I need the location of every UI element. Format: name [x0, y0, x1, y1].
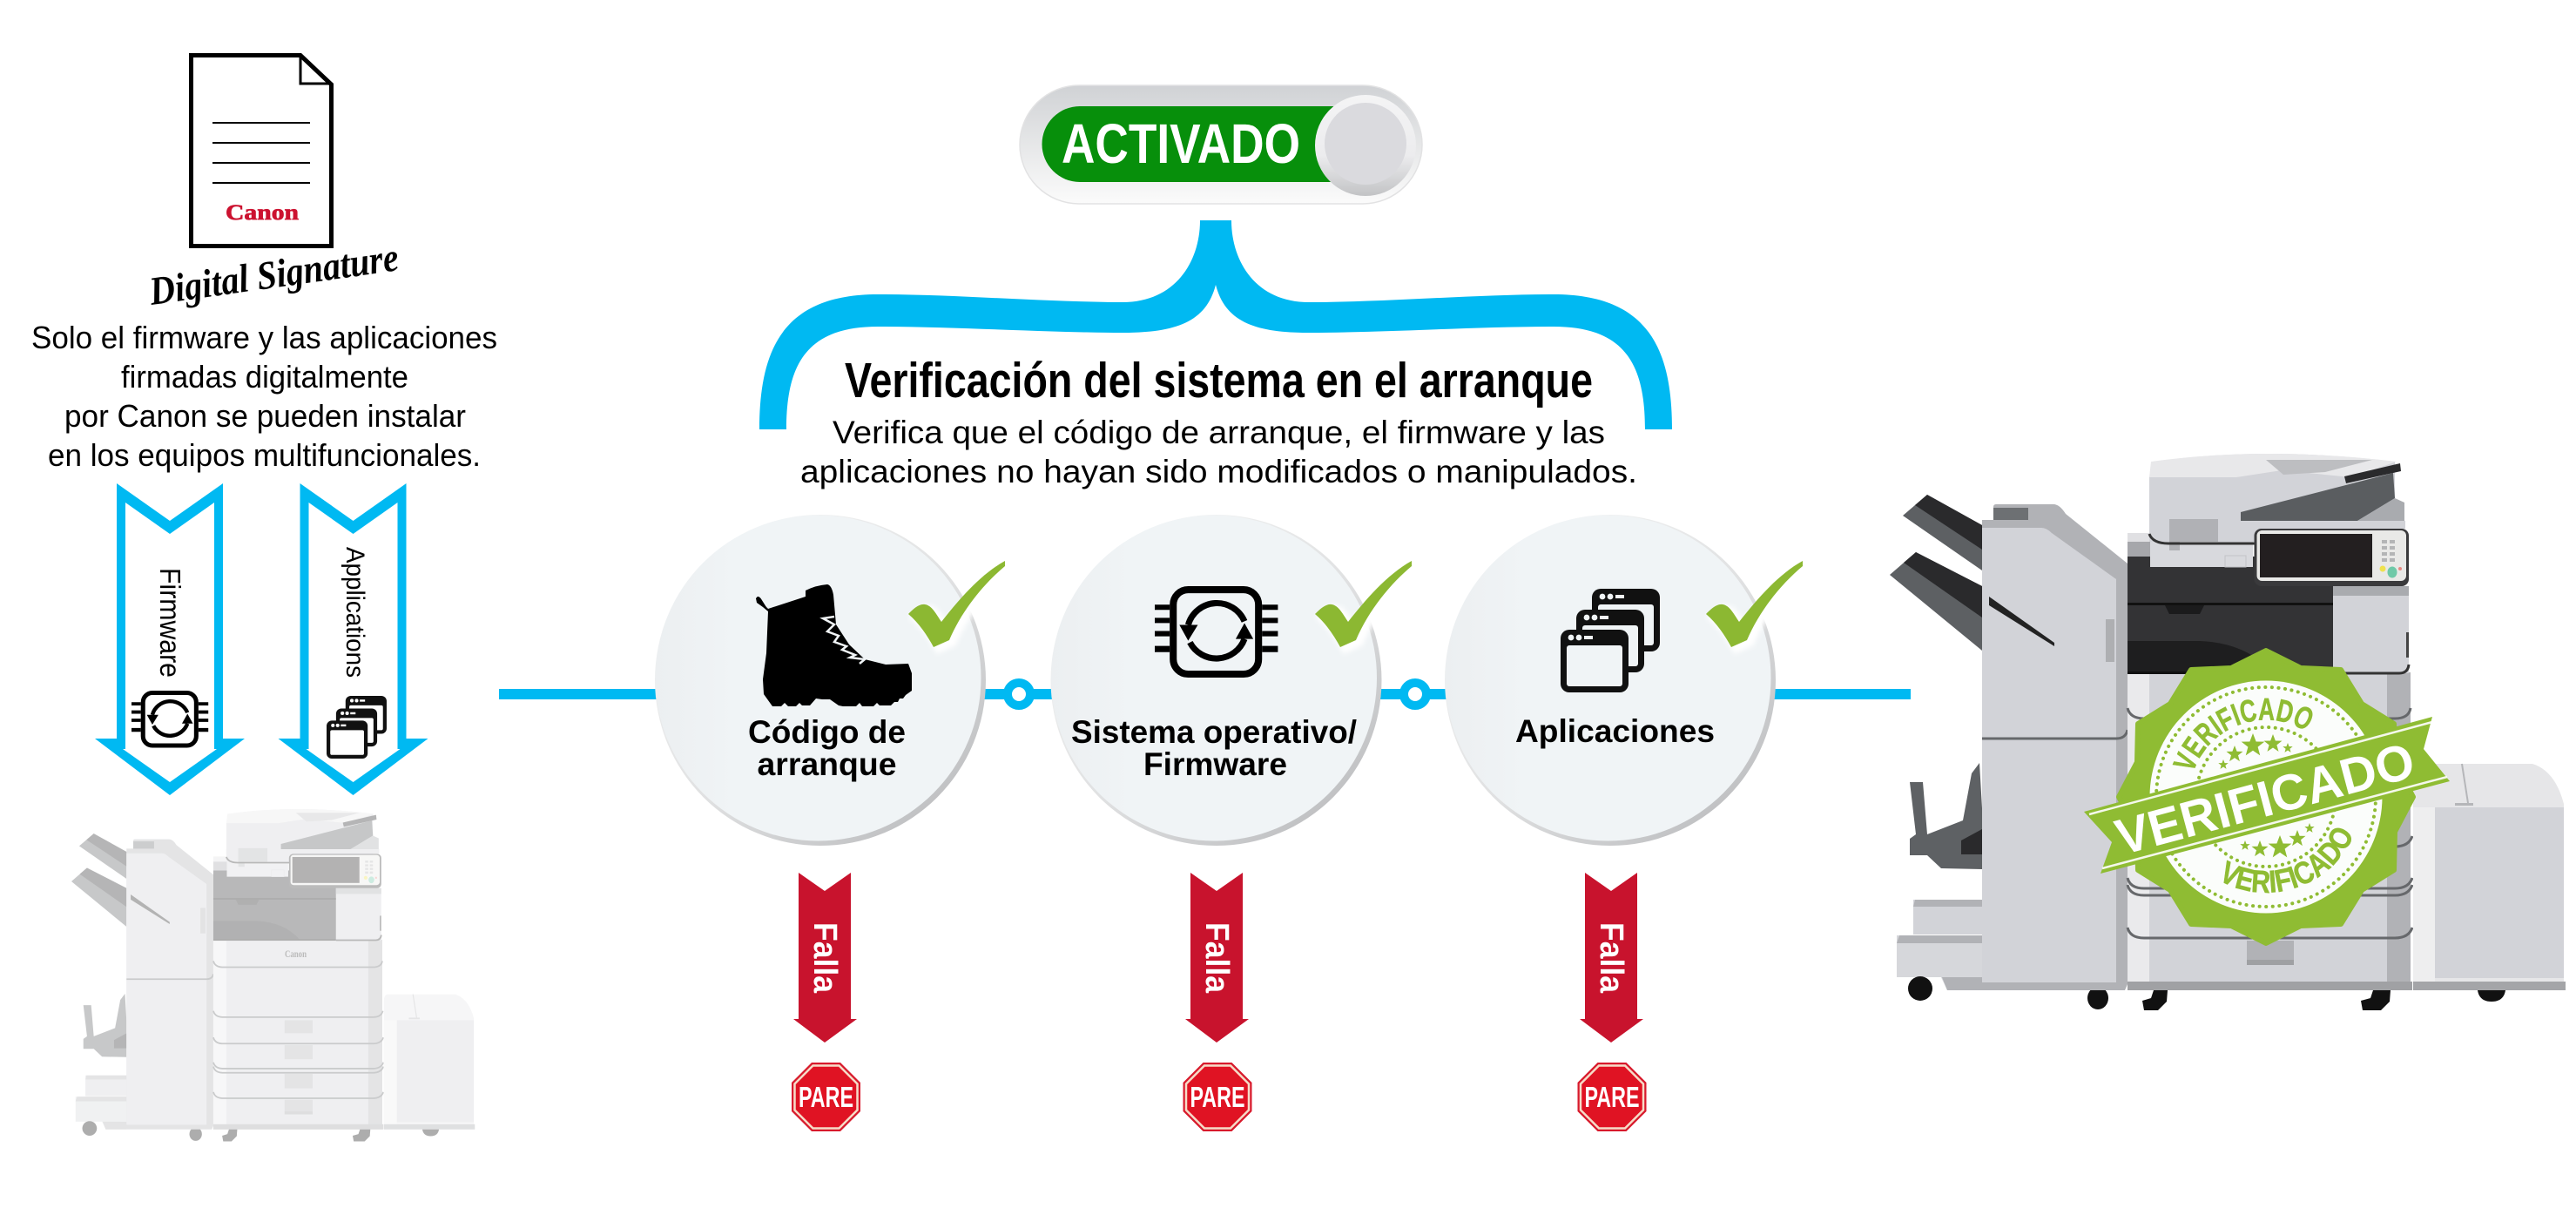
printer: faded installation target — [71, 809, 475, 1142]
stop sign 3 — [1578, 1063, 1646, 1131]
digital signature: Digital Signature — [145, 234, 401, 314]
stop sign 2: PARE — [1190, 1081, 1245, 1113]
label: Código de — [748, 714, 906, 750]
circle: applications — [1445, 515, 1776, 846]
verified badge — [2084, 648, 2450, 946]
description text: en los equipos multifuncionales. — [48, 437, 481, 473]
toggle switch — [1020, 85, 1422, 204]
fail arrow 3 — [1580, 873, 1643, 1043]
stop sign 1: PARE — [799, 1081, 853, 1113]
brace — [759, 220, 1672, 429]
fail arrow 1: Falla — [806, 922, 843, 994]
circle: operating system — [1050, 515, 1381, 846]
green checkmarks — [908, 561, 1807, 651]
firmware arrow: Firmware — [154, 568, 186, 678]
description text: firmadas digitalmente — [121, 359, 408, 395]
subheading — [800, 415, 1637, 489]
icon: chip — [1155, 590, 1278, 674]
description text: por Canon se pueden instalar — [64, 398, 466, 434]
heading: Verificación del sistema en el arranque — [845, 353, 1593, 408]
document icon: Canon — [226, 201, 299, 225]
label — [1071, 714, 1357, 782]
connector lines — [499, 683, 1911, 705]
printer: faded installation target: Canon — [285, 948, 307, 960]
label — [748, 714, 906, 782]
subheading: Verifica que el código de arranque, el firmware y las — [833, 415, 1605, 450]
toggle switch: ACTIVADO — [1062, 112, 1300, 175]
stop sign 3: PARE — [1585, 1081, 1639, 1113]
stop sign 2 — [1183, 1063, 1252, 1131]
icon: boot — [756, 584, 912, 706]
fail arrow 2 — [1185, 873, 1249, 1043]
label: arranque — [758, 746, 897, 782]
applications arrow: Applications — [341, 547, 369, 678]
firmware arrow — [95, 483, 245, 795]
description text: Solo el firmware y las aplicaciones — [31, 320, 497, 355]
ribbon: VERIFICADO — [2110, 732, 2420, 867]
label: Sistema operativo/ — [1071, 714, 1357, 750]
fail arrow 2: Falla — [1198, 922, 1235, 994]
icon: applications — [1561, 589, 1660, 692]
document icon — [192, 55, 332, 246]
subheading: aplicaciones no hayan sido modificados o manipulados. — [800, 454, 1637, 489]
circle: boot code — [655, 515, 986, 846]
fail arrow 1 — [793, 873, 857, 1043]
verified badge: VERIFICADO — [2224, 827, 2351, 894]
stop sign 1 — [792, 1063, 860, 1131]
label: Firmware — [1143, 746, 1287, 782]
printer: verified — [1890, 454, 2566, 1010]
fail arrow 3: Falla — [1593, 922, 1629, 994]
description text — [31, 320, 497, 473]
verified badge: VERIFICADO — [2172, 698, 2313, 768]
applications arrow — [279, 483, 428, 795]
label: Aplicaciones — [1515, 713, 1715, 749]
